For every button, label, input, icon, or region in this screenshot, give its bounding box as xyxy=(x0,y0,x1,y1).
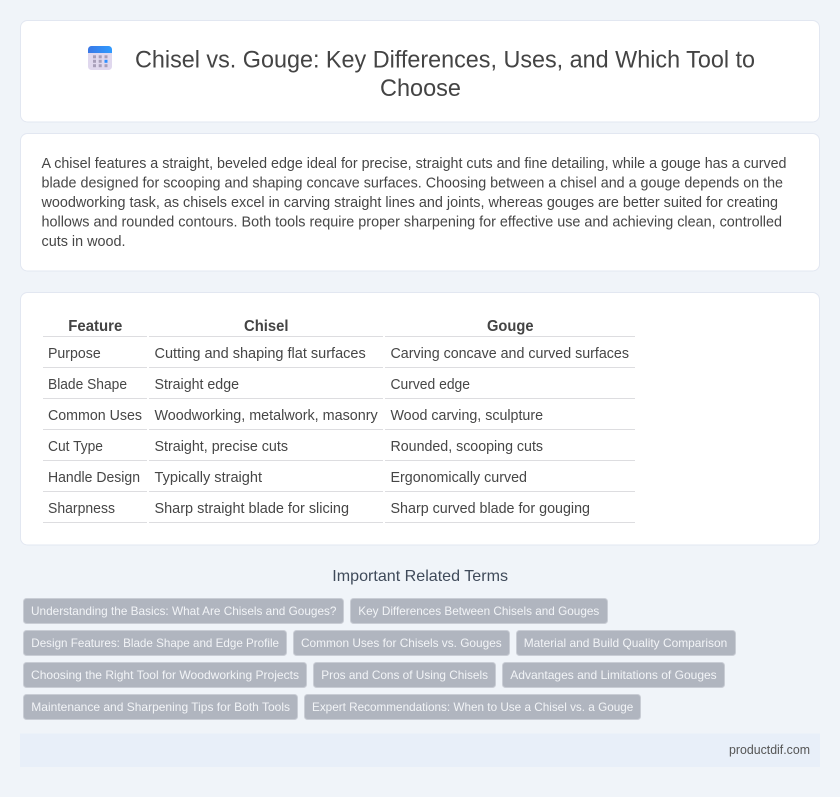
table row: cut type: Rounded, scooping cuts xyxy=(390,439,543,455)
table row: handle design: Ergonomically curved xyxy=(390,470,527,486)
panel: related term tags: Common Uses for Chisels vs. Gouges xyxy=(301,636,502,650)
text block: summary paragraph: blade designed for scooping and shaping concave surfaces. Choosing between a chisel and a gouge depends on the xyxy=(42,176,783,192)
table row: blade shape: Blade Shape xyxy=(48,377,127,393)
table row: purpose: Cutting and shaping flat surfaces xyxy=(154,346,366,362)
table row: handle design: Typically straight xyxy=(154,470,262,486)
panel: related term tags: Expert Recommendations: When to Use a Chisel vs. a Gouge xyxy=(312,700,634,714)
table row: sharpness xyxy=(43,501,635,522)
table row: blade shape: Curved edge xyxy=(390,377,470,393)
panel: related term tags xyxy=(24,598,736,720)
text block: summary paragraph xyxy=(41,156,786,250)
table row: blade shape: Straight edge xyxy=(154,377,239,393)
table row: common uses: Wood carving, sculpture xyxy=(390,408,543,424)
table row: purpose: Purpose xyxy=(48,346,101,362)
panel: related term tags: Material and Build Quality Comparison xyxy=(524,636,727,650)
footer: productdif.com xyxy=(729,742,810,757)
panel: related term tags: Understanding the Basics: What Are Chisels and Gouges? xyxy=(31,604,337,618)
panel: header xyxy=(20,20,820,122)
table row: cut type xyxy=(43,439,635,460)
table row: handle design xyxy=(43,470,635,492)
icon: calendar xyxy=(88,46,112,70)
title xyxy=(135,46,755,102)
panel: related term tags: Choosing the Right Tool for Woodworking Projects xyxy=(31,668,299,682)
table row: common uses xyxy=(43,408,635,430)
table row: purpose xyxy=(43,346,635,368)
table header row xyxy=(43,318,635,336)
footer xyxy=(20,734,820,767)
panel: related term tags: Key Differences Between Chisels and Gouges xyxy=(358,604,599,618)
table row: sharpness: Sharp straight blade for slicing xyxy=(154,501,349,517)
heading: important related terms: Important Related Terms xyxy=(332,568,508,585)
table row: purpose: Carving concave and curved surfaces xyxy=(390,346,629,362)
text block: summary paragraph: A chisel features a straight, beveled edge ideal for precise, straight cuts and fine detailing, while a gouge has a curved xyxy=(42,156,786,172)
text block: summary paragraph: woodworking task, as chisels excel in carving straight lines and joints, whereas gouges are better suited for creating xyxy=(41,195,778,211)
table row: sharpness: Sharpness xyxy=(48,501,115,517)
table row: handle design: Handle Design xyxy=(48,470,140,486)
table header row: Feature xyxy=(68,318,122,335)
panel: related term tags: Pros and Cons of Using Chisels xyxy=(321,668,488,682)
text block: summary paragraph: hollows and rounded contours. Both tools require proper sharpening for effective use and achieving clean, controlled xyxy=(42,214,782,230)
panel: comparison table xyxy=(20,292,820,545)
panel: related term tags: Advantages and Limitations of Gouges xyxy=(510,668,717,682)
panel: related term tags: Design Features: Blade Shape and Edge Profile xyxy=(31,636,279,650)
table row: cut type: Cut Type xyxy=(48,439,103,455)
table row: cut type: Straight, precise cuts xyxy=(154,439,288,455)
title: Choose xyxy=(380,75,461,102)
panel: summary text xyxy=(20,134,820,271)
table row: common uses: Woodworking, metalwork, masonry xyxy=(154,408,378,424)
table header row: Gouge xyxy=(487,318,534,335)
text block: summary paragraph: cuts in wood. xyxy=(42,234,126,250)
table row: common uses: Common Uses xyxy=(48,408,142,424)
panel: related term tags: Maintenance and Sharpening Tips for Both Tools xyxy=(31,700,290,714)
table row: sharpness: Sharp curved blade for gouging xyxy=(390,501,590,517)
table header row: Chisel xyxy=(244,318,288,335)
title: Chisel vs. Gouge: Key Differences, Uses, and Which Tool to xyxy=(135,46,755,74)
table row: blade shape xyxy=(43,377,635,398)
